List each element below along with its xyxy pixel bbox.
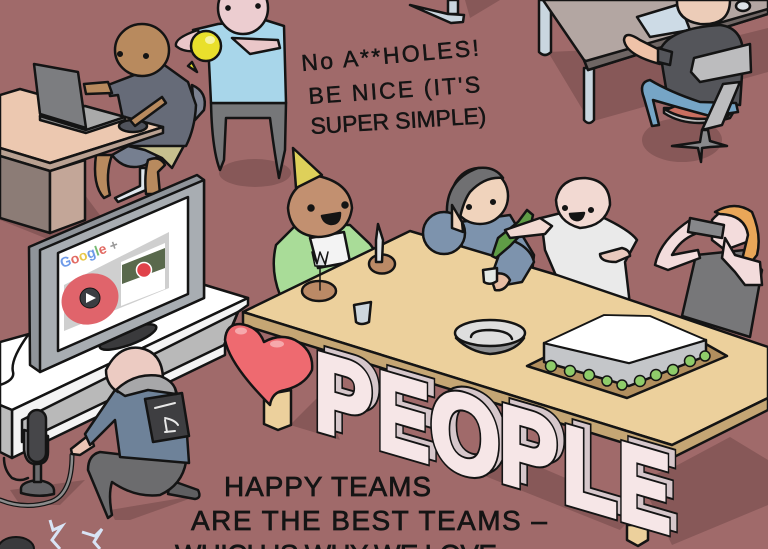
hand at the head [452, 205, 463, 232]
laptop [40, 106, 125, 130]
cake mat [527, 330, 727, 398]
orange hair [715, 206, 759, 276]
stand foot top centre [410, 0, 464, 23]
back leg [627, 525, 648, 546]
chair seat [112, 145, 160, 167]
slogan text: SUPER SIMPLE) [310, 102, 487, 139]
head [106, 348, 163, 392]
front leg [145, 158, 165, 194]
caption text: HAPPY TEAMS [224, 471, 431, 502]
chair back [691, 44, 751, 82]
letter front outlines: P [499, 381, 558, 521]
hand with knife [369, 254, 395, 274]
letter extrusion outlines [321, 325, 678, 549]
glass on table [354, 302, 371, 324]
person with party hat [274, 148, 380, 298]
cable [0, 455, 72, 506]
hair [447, 168, 503, 228]
desk leg back [539, 0, 551, 55]
stand base [21, 480, 54, 496]
hand [600, 248, 630, 262]
letter extrusion outlines: P [506, 377, 565, 517]
torso [541, 212, 637, 305]
mouth [322, 213, 340, 224]
letter front outlines [314, 329, 671, 549]
head [115, 24, 169, 76]
letter extrusion faces: E [384, 343, 437, 482]
letter front faces: L [562, 401, 617, 541]
shirt [193, 20, 286, 103]
table [243, 231, 768, 546]
hand [71, 434, 94, 455]
icon: heart [225, 324, 312, 405]
cake top [544, 315, 706, 363]
pouring arm [505, 218, 552, 238]
green bottle [492, 210, 533, 258]
letter extrusion faces [321, 325, 678, 549]
head [218, 0, 268, 34]
caption text: ARE THE BEST TEAMS – [191, 505, 547, 536]
play button [80, 288, 100, 308]
letter front outlines: L [562, 401, 617, 541]
upper arm [84, 82, 112, 94]
upper right desk with seated person [539, 0, 768, 162]
grey-haired person elbow [423, 212, 465, 254]
person with balloon [176, 0, 286, 178]
lower arm [490, 238, 534, 285]
red video blob [54, 265, 126, 333]
cake sides [544, 340, 706, 386]
letter extrusion faces: P [506, 377, 565, 517]
trousers [642, 80, 738, 126]
person with grey hair [447, 168, 534, 290]
letter front faces: P [314, 329, 373, 469]
letter front faces: P [499, 381, 558, 521]
slogan text: No A**HOLES! [300, 35, 480, 76]
shirt [108, 64, 196, 146]
content panel [64, 232, 169, 331]
chair post and foot [115, 168, 146, 202]
shorts [128, 138, 188, 168]
head [452, 168, 508, 224]
letter extrusion outlines: L [569, 397, 624, 537]
table top [243, 231, 768, 445]
items on the table [302, 205, 727, 398]
card [121, 243, 165, 306]
letter front outlines: P [314, 329, 373, 469]
cable on console [0, 335, 28, 385]
mouse [736, 1, 750, 11]
head [677, 0, 730, 24]
back leg [95, 155, 112, 198]
desk leg front [584, 68, 594, 123]
slogan text [300, 35, 487, 139]
microphone and cable [0, 410, 72, 506]
phone [688, 218, 724, 238]
party hat [293, 148, 322, 188]
letter extrusion outlines: P [321, 325, 380, 465]
right arm [722, 238, 762, 285]
plate [456, 338, 524, 354]
table edge [243, 312, 768, 458]
back patch [145, 393, 189, 442]
trailing foot [168, 480, 199, 499]
letter extrusion outlines: E [384, 343, 437, 482]
letter front outlines: O [430, 362, 500, 506]
letter front faces: E [377, 347, 430, 486]
letter extrusion outlines: O [437, 358, 507, 502]
arm [232, 38, 280, 54]
left arm [655, 220, 700, 270]
white undershirt [310, 232, 350, 268]
mic cradle [24, 430, 48, 464]
green shirt [274, 224, 380, 298]
letter front faces [314, 329, 671, 549]
green frosting drops [546, 351, 710, 390]
table leg under heart [264, 390, 291, 430]
Google+ logo: Google + [58, 236, 120, 271]
left desk with laptop and person [0, 24, 205, 233]
drinking glass [483, 268, 497, 284]
chair seat [664, 108, 736, 123]
head [556, 178, 610, 228]
letter extrusion faces: L [569, 397, 624, 537]
mouse and forearm [119, 120, 147, 132]
head [288, 176, 352, 237]
letter front outlines: E [377, 347, 430, 486]
desk body [0, 156, 50, 233]
grey top [682, 250, 762, 337]
chair base [672, 130, 727, 162]
desk top [0, 89, 163, 163]
mic capsule [28, 410, 46, 462]
lightning sparks [50, 520, 102, 549]
frame [29, 175, 204, 372]
letter extrusion faces: O [437, 358, 507, 502]
arm [624, 35, 660, 64]
black cable end [0, 537, 34, 549]
slogan text: BE NICE (IT'S [308, 71, 481, 109]
person taking a photo [655, 206, 762, 337]
torso [460, 215, 534, 290]
desk top [543, 0, 768, 70]
crouching person [71, 348, 199, 518]
head [712, 208, 752, 250]
person in white shirt [541, 178, 637, 305]
torso [660, 25, 743, 105]
letter extrusion faces: P [321, 325, 380, 465]
icon: yellow balloon [188, 31, 221, 72]
TV [29, 175, 204, 372]
stand disc [97, 319, 159, 355]
letter front faces: O [430, 362, 500, 506]
chair back [192, 85, 205, 120]
hood [116, 375, 176, 396]
jacket [85, 388, 189, 463]
screen [58, 197, 188, 351]
TV console [0, 285, 248, 458]
caption text [175, 471, 547, 549]
trousers [88, 452, 186, 518]
trousers [211, 103, 286, 178]
PEOPLE block letters [314, 325, 678, 549]
hand with fork [302, 281, 336, 301]
red subscribe icon [136, 262, 152, 278]
paper on desk [637, 4, 690, 37]
